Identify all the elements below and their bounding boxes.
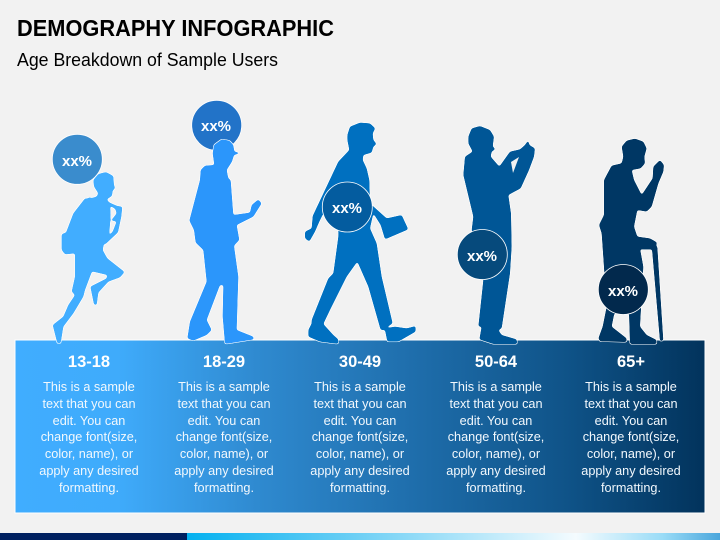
footer bar [0,533,720,540]
column: 18-29 [174,353,274,495]
badge: 50-64 percentage: xx% [467,248,497,265]
column: 50-64: edit. You can [460,414,532,428]
figure: young adult with cap and phone [187,139,262,344]
column: 30-49: apply any desired [310,464,410,478]
column: 30-49: edit. You can [324,414,396,428]
column: 13-18: 13-18 [68,353,110,371]
column: 50-64: This is a sample [450,380,542,394]
title: DEMOGRAPHY INFOGRAPHIC [17,15,334,41]
column: 65+ [581,353,681,495]
column: 50-64: color, name), or [452,447,541,461]
column: 50-64: apply any desired [446,464,546,478]
column: 65+: text that you can [584,397,678,411]
gradient band panel [15,340,705,513]
column: 13-18: change font(size, [41,430,137,444]
column: 18-29: 18-29 [203,353,245,371]
column: 13-18 [39,353,139,495]
column: 13-18: apply any desired [39,464,139,478]
column: 50-64: 50-64 [475,353,518,371]
column: 50-64: text that you can [449,397,543,411]
column: 30-49: This is a sample [314,380,406,394]
column: 18-29: edit. You can [188,414,260,428]
column: 50-64 [446,353,546,495]
column: 13-18: This is a sample [43,380,135,394]
badge: 30-49 percentage: xx% [332,200,362,217]
column: 18-29: change font(size, [176,430,272,444]
column: 50-64: formatting. [466,481,526,495]
column: 65+: This is a sample [585,380,677,394]
column: 30-49: 30-49 [339,353,381,371]
column: 50-64: change font(size, [448,430,544,444]
column: 13-18: edit. You can [53,414,125,428]
figure: adult walking with book [305,123,416,344]
badge: 18-29 percentage: xx% [201,118,231,135]
column: 13-18: formatting. [59,481,119,495]
column: 13-18: color, name), or [45,447,134,461]
column: 65+: color, name), or [587,447,676,461]
subtitle: Age Breakdown of Sample Users [17,50,278,70]
badge: 30-49 percentage [322,182,372,232]
badge: 50-64 percentage [457,230,507,280]
column: 30-49 [310,353,410,495]
column: 65+: edit. You can [595,414,667,428]
column: 18-29: This is a sample [178,380,270,394]
column: 18-29: color, name), or [180,447,269,461]
icon: phone gap [511,157,519,173]
column: 13-18: text that you can [42,397,136,411]
column: 65+: apply any desired [581,464,681,478]
column: 30-49: color, name), or [316,447,405,461]
figure: senior with cane [598,139,664,344]
column: 18-29: text that you can [177,397,271,411]
column: 18-29: formatting. [194,481,254,495]
figure: middle-aged man with phone [463,126,535,344]
badge: 65+ percentage: xx% [608,283,638,300]
badge: 65+ percentage [598,264,648,314]
column: 30-49: formatting. [330,481,390,495]
badge: 13-18 percentage [52,134,102,184]
column: 65+: formatting. [601,481,661,495]
column: 30-49: text that you can [313,397,407,411]
column: 65+: change font(size, [583,430,679,444]
column: 18-29: apply any desired [174,464,274,478]
column: 30-49: change font(size, [312,430,408,444]
badge: 18-29 percentage [192,100,242,150]
badge: 13-18 percentage: xx% [62,153,92,170]
figure: teen runner with backpack [53,172,125,343]
column: 65+: 65+ [617,353,645,371]
